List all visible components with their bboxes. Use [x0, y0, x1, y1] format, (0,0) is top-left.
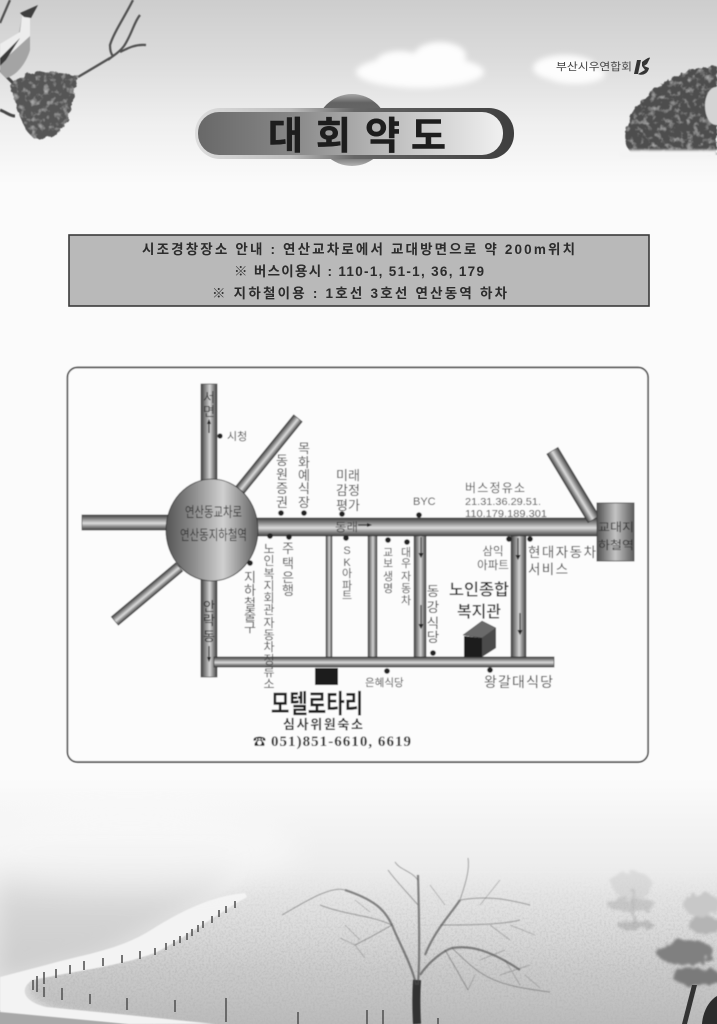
- landmark labels: 예: [298, 468, 310, 483]
- landmark labels: 감정: [336, 483, 360, 498]
- landmark labels: 대: [401, 546, 411, 559]
- landmark labels: 증: [276, 481, 288, 496]
- landmark labels: 21.31.36.29.51.: [465, 496, 541, 508]
- interchange circle: 연산동지하철역: [180, 527, 247, 543]
- landmark labels: 철: [244, 596, 256, 611]
- landmark labels: 지: [263, 579, 275, 593]
- landmark labels: 자: [401, 570, 411, 583]
- road labels: 하철역: [598, 538, 634, 552]
- bottom left ground: [0, 1010, 130, 1024]
- motel marker and contact: [253, 668, 411, 750]
- hill: [29, 870, 717, 1024]
- landmark labels: 차: [401, 594, 411, 607]
- road labels: 안: [203, 599, 215, 614]
- landmark labels: S: [343, 545, 351, 557]
- road labels: 서: [203, 390, 215, 405]
- landmark labels: 자: [263, 616, 275, 630]
- far slope: [0, 850, 240, 977]
- motel marker and contact: 모텔로타리: [271, 689, 363, 719]
- landmark labels: 우: [401, 557, 411, 570]
- landmark labels: 지: [244, 570, 256, 585]
- landmark labels: 화: [298, 455, 310, 470]
- landmark labels: K: [343, 557, 351, 569]
- banner sphere: [316, 94, 388, 166]
- distant tree: [608, 871, 656, 930]
- landmark labels: 하: [244, 583, 256, 598]
- landmark labels: 식: [427, 616, 439, 631]
- landmark labels: 현대자동차: [528, 545, 597, 560]
- banner pill: [195, 108, 514, 159]
- welfare center building: 노인종합: [449, 581, 509, 599]
- bird: [0, 14, 30, 78]
- landmark labels: 은혜식당: [365, 677, 404, 689]
- landmark labels: 명: [383, 582, 393, 595]
- landmark labels: 왕갈대식당: [484, 674, 553, 690]
- road labels: [203, 390, 634, 644]
- landmark labels: 교: [383, 547, 393, 559]
- landmark labels: 정: [263, 653, 275, 667]
- landmark labels: 아파트: [477, 559, 509, 572]
- organization logo: [556, 58, 650, 75]
- road labels: 동: [203, 629, 215, 644]
- landmark labels: 파: [342, 579, 352, 592]
- nest: [10, 72, 79, 139]
- organization logo: 부산시우연합회: [556, 61, 632, 73]
- landmark labels: 회: [263, 591, 275, 605]
- motel marker and contact: 심사위원숙소: [283, 717, 363, 732]
- landmark labels: 동: [276, 453, 288, 468]
- landmark labels: 트: [342, 590, 352, 602]
- landmark labels: 택: [282, 556, 294, 571]
- landmark labels: 노: [263, 542, 275, 556]
- location line: 시조경창장소 안내 : 연산교차로에서 교대방면으로 약 200m위치: [142, 242, 575, 257]
- interchange circle: 연산동교차로: [185, 504, 242, 520]
- landmark labels: 보: [383, 557, 393, 570]
- road network: [82, 384, 634, 677]
- photo: misty winter landscape: [0, 810, 717, 1024]
- landmark labels: 평가: [336, 498, 360, 513]
- landmark labels: 강: [427, 600, 439, 615]
- motel marker and contact: 051)851-6610, 6619: [271, 734, 411, 750]
- map panel: [68, 368, 648, 762]
- road labels: 동래: [335, 521, 358, 534]
- landmark labels: 권: [276, 495, 288, 510]
- road labels: 락: [203, 613, 215, 628]
- landmark labels: 소: [263, 677, 275, 691]
- landmark labels: 구: [244, 620, 256, 635]
- landmark labels: 미래: [336, 468, 360, 483]
- fog overlay: [0, 810, 300, 890]
- landmark labels: 장: [298, 495, 310, 510]
- landmark labels: 류: [263, 665, 275, 679]
- landmark labels: 인: [263, 554, 275, 568]
- welfare center building: [449, 581, 509, 657]
- road labels: 면: [203, 404, 215, 419]
- location dots: [217, 433, 533, 674]
- title text: 대회약도: [268, 116, 446, 158]
- fence posts: [33, 901, 438, 1024]
- white footpath: [0, 893, 247, 1024]
- clouds: [356, 42, 605, 88]
- landmark labels: 당: [427, 630, 439, 645]
- landmark labels: 110.179.189.301: [465, 508, 547, 520]
- landmark labels: 관: [263, 603, 275, 617]
- landmark labels: 삼익: [482, 545, 504, 558]
- landmark labels: 아: [342, 567, 352, 580]
- landmark labels: 식: [298, 481, 310, 496]
- subway line: ※ 지하철이용 : 1호선 3호선 연산동역 하차: [212, 286, 508, 301]
- road labels: 교대지: [598, 521, 634, 534]
- landmark labels: 출: [244, 608, 256, 623]
- title banner: [195, 94, 514, 166]
- info panel: [69, 235, 649, 306]
- landmark labels: 시청: [227, 430, 247, 443]
- landmark labels: 차: [263, 640, 275, 654]
- landmark labels: 서비스: [528, 562, 568, 577]
- bus line: ※ 버스이용시 : 110-1, 51-1, 36, 179: [234, 264, 484, 279]
- welfare center building: 복지관: [457, 603, 501, 621]
- landmark labels: [227, 430, 597, 691]
- landmark labels: 동: [401, 583, 411, 595]
- landmark labels: BYC: [413, 496, 436, 508]
- landmark labels: 원: [276, 467, 288, 482]
- landmark labels: 목: [298, 441, 310, 456]
- landmark labels: 버스정유소: [465, 481, 525, 495]
- bare tree: [282, 858, 550, 1024]
- interchange circle: [166, 479, 258, 581]
- landmark labels: 복: [263, 567, 275, 581]
- landmark labels: 행: [282, 583, 294, 598]
- landmark labels: 동: [263, 628, 275, 642]
- photo: rocky nest at right: [620, 66, 717, 158]
- landmark labels: 동: [427, 584, 439, 599]
- pine tree: [657, 893, 717, 1024]
- photo: bird and nest: [0, 0, 146, 139]
- landmark labels: 주: [282, 541, 294, 556]
- motel marker and contact: ☎: [253, 734, 266, 749]
- landmark labels: 은: [282, 570, 294, 585]
- landmark labels: 생: [383, 570, 393, 583]
